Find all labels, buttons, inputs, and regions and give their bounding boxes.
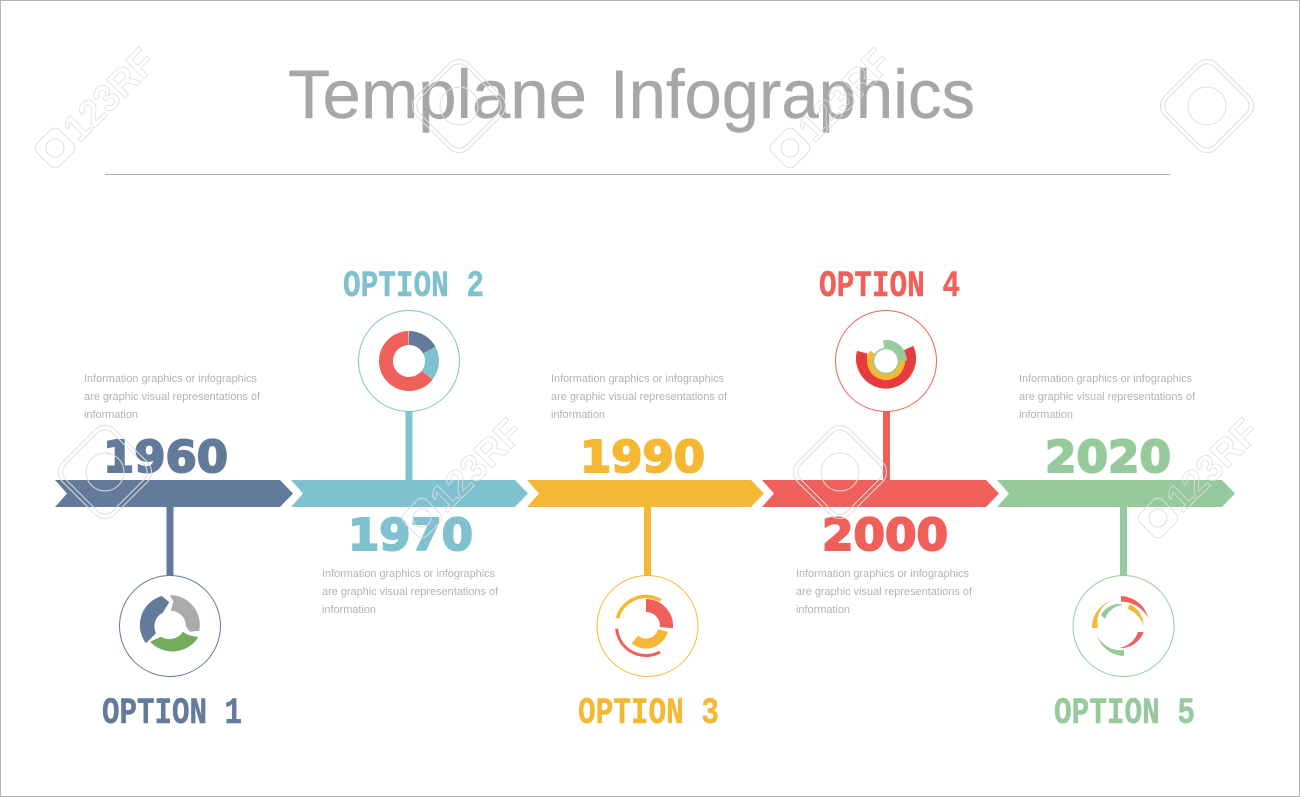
connector 2	[406, 411, 412, 480]
connector 4	[883, 411, 890, 480]
circle icon 5	[1073, 576, 1174, 676]
description text 5: Information graphics or infographics	[1019, 373, 1192, 385]
description text 1: are graphic visual representations of	[84, 391, 261, 403]
arrow: 2020 segment	[997, 480, 1235, 507]
milestone: option 1, 1960	[84, 373, 261, 735]
title: Templane	[288, 56, 587, 133]
watermark: logo with text, middle left	[397, 411, 532, 546]
year 2020: 2020	[1045, 432, 1171, 483]
year 2000: 2000	[822, 510, 948, 561]
arrow: 2000 segment	[762, 480, 999, 507]
label option 5: OPTION 5	[1054, 693, 1195, 735]
milestone: option 5, 2020	[1019, 373, 1196, 735]
connector 3	[644, 507, 651, 576]
watermark: large emblem, middle left	[53, 420, 157, 524]
circle icon 3	[597, 576, 698, 676]
title	[288, 56, 975, 133]
description text 5: are graphic visual representations of	[1019, 391, 1196, 403]
watermark: large emblem, top right	[1155, 54, 1259, 158]
label option 1: OPTION 1	[102, 693, 242, 735]
description text 4: information	[796, 604, 850, 616]
milestone: option 3, 1990	[551, 373, 728, 735]
watermark: logo with text, middle right	[1133, 411, 1268, 546]
watermark: logo with text, top left	[30, 41, 165, 176]
watermark: logo with text, top centre: 123RF	[791, 41, 900, 150]
description text 2: information	[322, 604, 376, 616]
year 1990: 1990	[580, 432, 705, 483]
description text 1: Information graphics or infographics	[84, 373, 257, 385]
description text 4: Information graphics or infographics	[796, 568, 969, 580]
circle icon 4	[836, 310, 936, 412]
circle icon 1	[120, 576, 220, 676]
arrow: 1960 segment	[55, 480, 293, 507]
label option 4: OPTION 4	[819, 266, 960, 308]
label option 3: OPTION 3	[578, 693, 719, 735]
timeline arrows	[55, 480, 1235, 507]
description text 2: Information graphics or infographics	[322, 568, 495, 580]
description text 2: are graphic visual representations of	[322, 586, 499, 598]
watermark: logo with text, top left: 123RF	[56, 41, 165, 150]
milestone: option 4, 2000	[796, 266, 973, 616]
milestone: option 2, 1970	[322, 266, 499, 616]
watermark: logo with text, top centre	[765, 41, 900, 176]
description text 1: information	[84, 409, 138, 421]
description text 3: Information graphics or infographics	[551, 373, 724, 385]
arrow: 1990 segment	[527, 480, 764, 507]
arrow: 1970 segment	[291, 480, 528, 507]
description text 3: information	[551, 409, 605, 421]
description text 4: are graphic visual representations of	[796, 586, 973, 598]
watermark: logo with text, middle left: 123RF	[423, 411, 532, 520]
year 1970: 1970	[348, 510, 473, 561]
title: Infographics	[610, 56, 975, 133]
watermark: logo with text, middle right: 123RF	[1159, 411, 1268, 520]
description text 3: are graphic visual representations of	[551, 391, 728, 403]
connector 5	[1120, 507, 1127, 576]
circle icon 2	[358, 310, 460, 412]
watermark: large emblem, top centre-left	[407, 54, 511, 158]
watermark: large emblem, middle centre	[788, 420, 892, 524]
description text 5: information	[1019, 409, 1073, 421]
label option 2: OPTION 2	[343, 266, 484, 308]
connector 1	[166, 507, 174, 576]
watermarks	[30, 41, 1268, 546]
year 1960: 1960	[103, 432, 228, 483]
